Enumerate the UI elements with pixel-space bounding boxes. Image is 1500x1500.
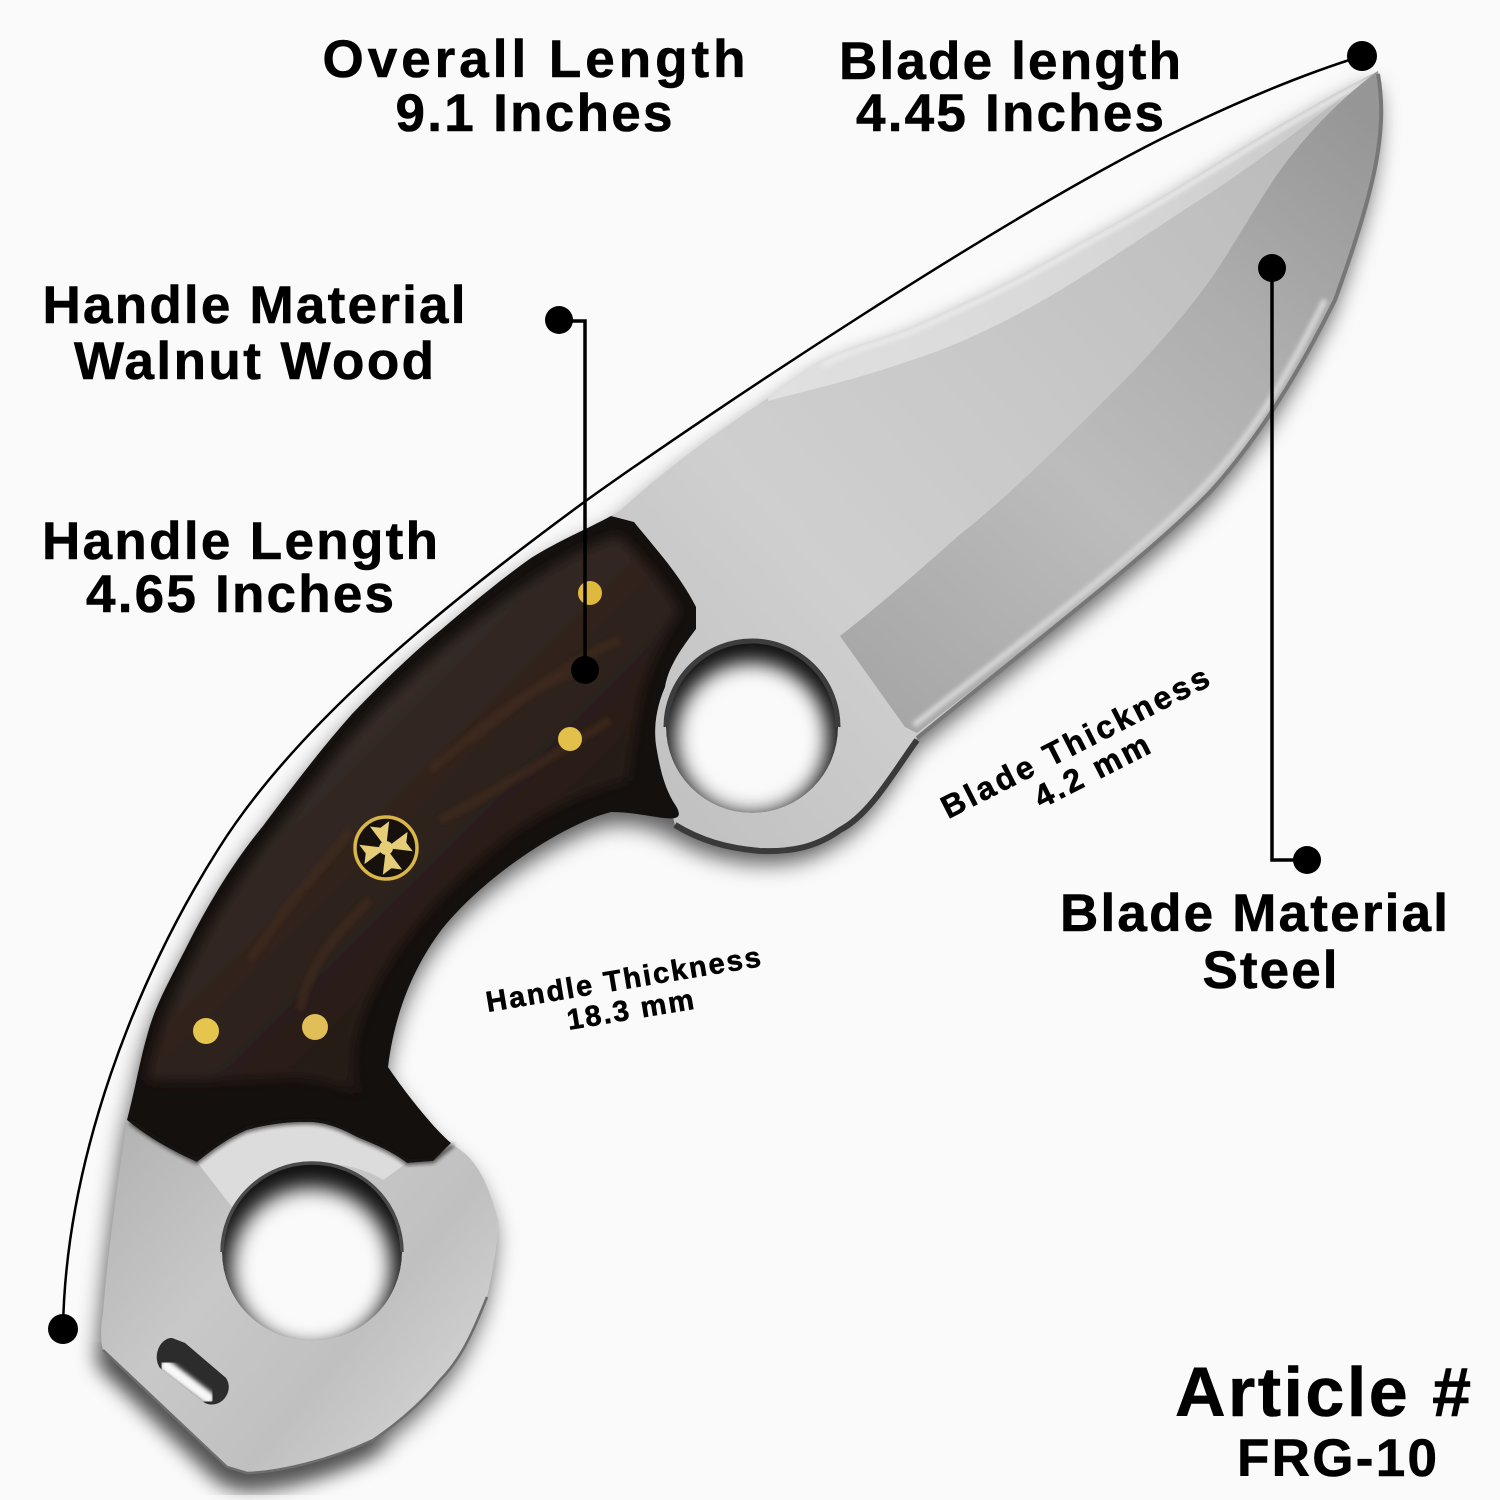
icon: brass cross medallion	[355, 817, 417, 879]
butt ring	[101, 1120, 498, 1473]
blade material pointer	[1258, 254, 1321, 874]
label: blade material: Steel	[1202, 941, 1338, 1000]
blade swedge bevel	[768, 71, 1378, 401]
label: blade material: Blade Material	[1060, 884, 1448, 943]
knife drop shadow	[98, 84, 1378, 1486]
blade edge bevel highlight	[914, 300, 1325, 725]
label: handle thickness: 18.3 mm	[565, 984, 696, 1037]
finger hole inner shadow	[666, 644, 838, 813]
handle wood grain panel	[146, 535, 680, 1095]
label: handle thickness: Handle Thickness	[484, 941, 763, 1019]
label: overall length: 9.1 Inches	[396, 84, 672, 143]
label: handle length: 4.65 Inches	[86, 565, 394, 624]
blade	[611, 71, 1381, 851]
label: blade length: Blade length	[839, 32, 1181, 91]
label: overall length: Overall Length	[322, 30, 746, 89]
label: article number: FRG-10	[1237, 1429, 1437, 1488]
handle material pointer	[545, 306, 599, 684]
blade edge line	[917, 74, 1381, 738]
butt hole inner shadow	[222, 1164, 402, 1341]
label: blade length: 4.45 Inches	[856, 84, 1164, 143]
butt ring inner wall	[222, 1163, 402, 1252]
overall length dimension line	[48, 41, 1377, 1344]
butt scorch line	[130, 1122, 453, 1163]
label: handle material: Handle Material	[42, 276, 466, 335]
label: article number	[1175, 1353, 1471, 1488]
label: handle material: Walnut Wood	[74, 332, 434, 391]
handle scale	[127, 516, 696, 1163]
label: handle length	[42, 512, 438, 624]
label: blade thickness: 4.2 mm	[1028, 726, 1156, 815]
label: blade thickness: Blade Thickness	[935, 659, 1215, 825]
blade spine highlight	[822, 80, 1370, 366]
blade hollow grind	[840, 71, 1381, 733]
label: blade material	[1060, 884, 1448, 1000]
label: overall length	[322, 30, 746, 143]
finger ring lower edge	[675, 740, 917, 851]
handle pins	[193, 581, 602, 1044]
wood grain streaks	[250, 640, 620, 1010]
label: handle material	[42, 276, 466, 391]
butt bottom edge	[103, 1297, 487, 1473]
lanyard slot	[157, 1338, 229, 1405]
label: handle length: Handle Length	[42, 512, 438, 571]
butt ring top facet	[197, 1122, 407, 1207]
finger ring inner wall	[666, 641, 838, 727]
label: article number: Article #	[1175, 1353, 1471, 1431]
butt extra shadow	[103, 1355, 380, 1482]
label: blade length	[839, 32, 1181, 143]
